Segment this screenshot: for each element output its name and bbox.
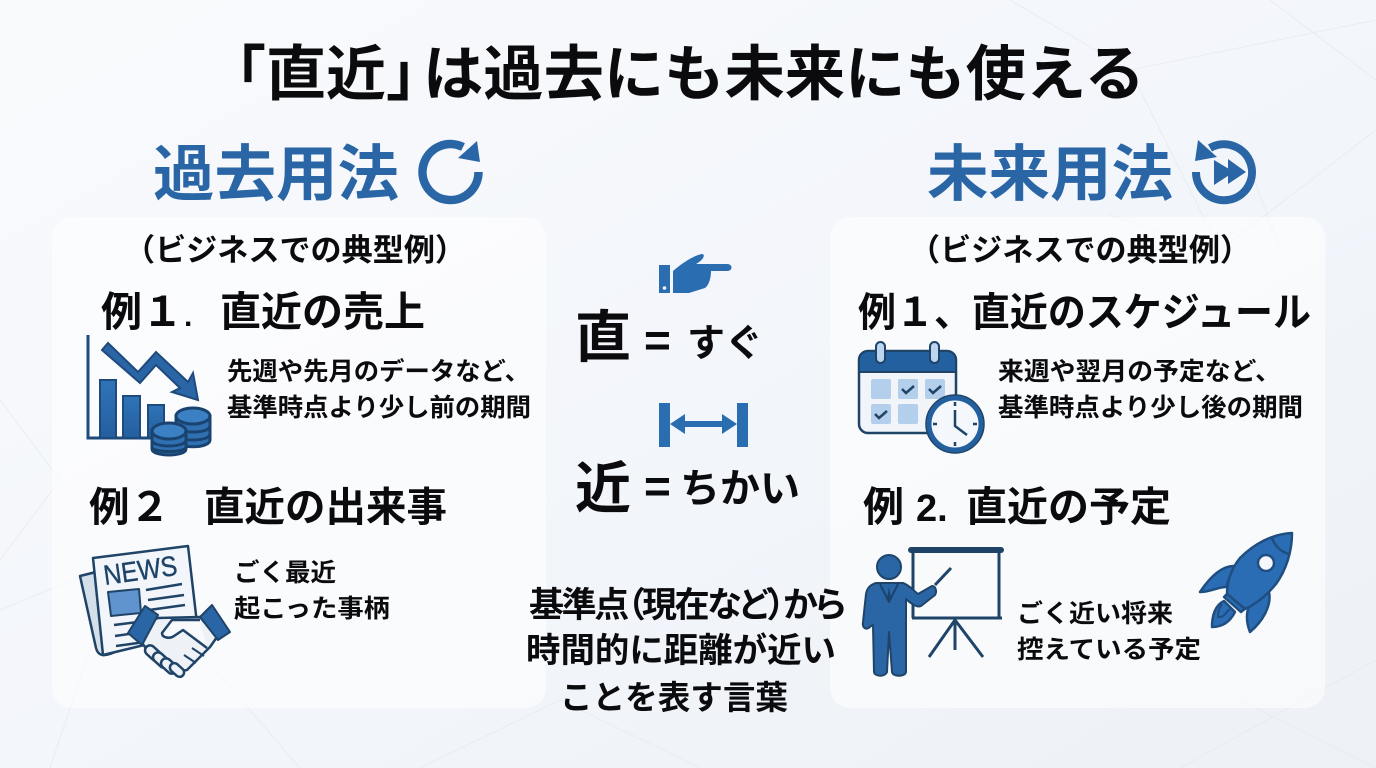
heading: past usage: 過去用法	[153, 140, 399, 208]
example 2 description: 控えている予定	[1017, 636, 1201, 664]
icon: presenter at screen	[863, 547, 1004, 676]
icon: distance arrow	[659, 403, 748, 447]
example 1 heading: 直近の売上	[220, 289, 425, 335]
heading: future usage: 未来用法	[927, 140, 1173, 208]
example 2 description: ごく近い将来	[1017, 599, 1173, 628]
example 1 description: 先週や先月のデータなど、	[227, 357, 530, 386]
center definition: kin	[575, 403, 800, 520]
panel: future usage	[830, 217, 1325, 708]
example 2 description: ごく最近	[234, 558, 336, 587]
example 2 description	[1017, 599, 1201, 664]
icon: pointing hand	[659, 254, 732, 293]
example 2 heading: 2.	[916, 488, 948, 530]
example 1 heading: .	[184, 300, 192, 333]
example 1 heading: 例１	[101, 289, 183, 335]
example 2 heading: 直近の予定	[966, 484, 1171, 530]
center explanation: 時間的に距離が近い	[526, 631, 836, 670]
kanji choku: 直	[575, 306, 631, 369]
center explanation: 基準点（現在など）から	[529, 586, 846, 625]
example 1 description: 基準時点より少し前の期間	[227, 394, 531, 422]
icon: calendar and clock	[859, 342, 984, 453]
panel subtitle: （ビジネスでの典型例）	[909, 233, 1251, 268]
panel subtitle: （ビジネスでの典型例）	[124, 233, 466, 268]
example 1 description	[998, 358, 1303, 422]
example 1 description	[227, 357, 531, 422]
meaning: chikai: =	[644, 460, 671, 512]
kanji kin: 近	[575, 457, 631, 520]
panel: past usage	[52, 217, 546, 708]
icon: newspaper and handshake	[80, 546, 230, 679]
icon: circular arrow with fast-forward	[1195, 140, 1252, 200]
example 2 description: 起こった事柄	[234, 595, 390, 623]
meaning: sugu: =	[644, 314, 671, 366]
center definition: choku	[575, 254, 763, 369]
example 1 description: 基準時点より少し後の期間	[998, 394, 1303, 422]
example 2 heading: 例２	[89, 484, 170, 530]
meaning: chikai: ちかい	[680, 467, 800, 511]
example 2 heading: 直近の出来事	[204, 484, 447, 530]
example 1 heading: 例１、直近のスケジュール	[858, 291, 1311, 335]
title: は過去にも未来にも使える	[423, 40, 1145, 108]
meaning: sugu: すぐ	[687, 323, 763, 365]
icon: falling chart and coins	[88, 335, 210, 455]
center explanation: ことを表す言葉	[560, 679, 788, 716]
icon: circular arrow clockwise	[422, 141, 480, 200]
title: 「直近」	[206, 41, 446, 108]
presenter figure	[863, 555, 936, 676]
center explanation	[526, 586, 846, 716]
icon: rocket	[1200, 533, 1292, 632]
icon: newspaper and handshake: NEWS	[102, 550, 179, 591]
example 1 description: 来週や翌月の予定など、	[998, 358, 1281, 386]
example 2 description	[234, 558, 390, 623]
example 2 heading: 例	[863, 484, 904, 530]
